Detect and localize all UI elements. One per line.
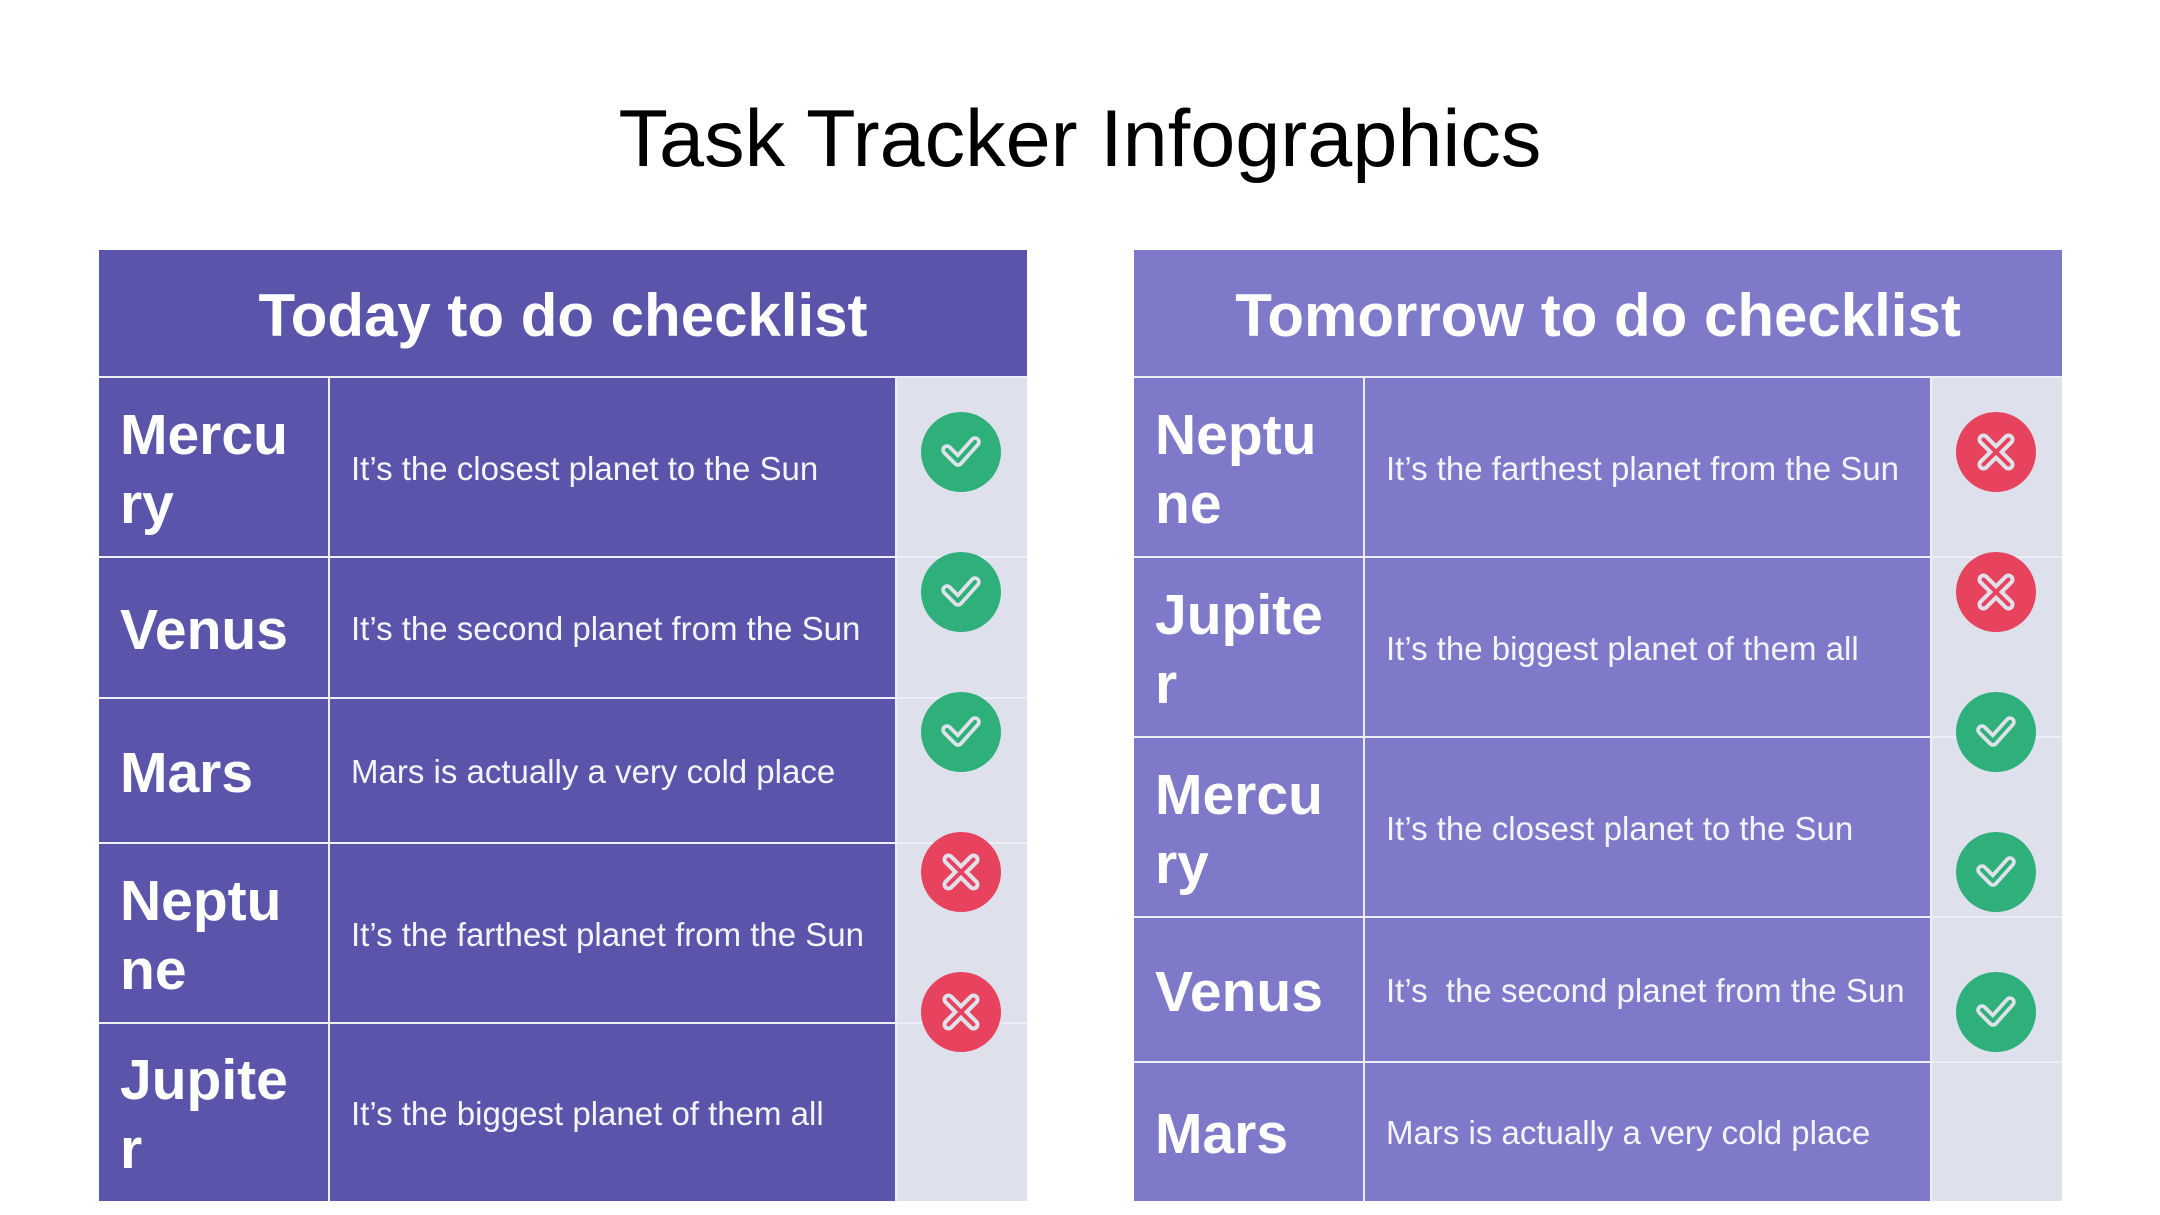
icon: check 1 [921, 412, 1001, 492]
icon: cross 2 [921, 972, 1001, 1052]
row name: Mercury: Mercu [1155, 762, 1323, 826]
row name: Jupiter: Jupite [120, 1048, 288, 1112]
icon: check 3 [1956, 972, 2036, 1052]
row name: Neptune [120, 868, 281, 1002]
status column [896, 377, 1027, 1201]
row name: Jupiter: r [1155, 652, 1177, 716]
row text: Mars: Mars is actually a very cold place [1386, 1114, 1870, 1151]
row text: Mercury: It’s the closest planet to the Sun [1386, 810, 1853, 846]
row name: Venus: Venus [120, 598, 288, 662]
row name: Venus: Venus [1155, 960, 1323, 1024]
row text: Jupiter: It’s the biggest planet of them all [351, 1094, 824, 1132]
row text: Neptune: It’s the farthest planet from the Sun [1386, 450, 1899, 486]
row name: Mercury: Mercu [120, 402, 288, 466]
row name: Mercury: ry [120, 472, 174, 536]
panel: tomorrow checklist [1134, 250, 2062, 1201]
row name: Neptune: Neptu [1155, 402, 1316, 466]
row name: Jupiter [1155, 582, 1323, 716]
row name: Neptune: Neptu [120, 868, 281, 932]
row name: Mercury [1155, 762, 1323, 896]
title: Task Tracker Infographics [619, 94, 1541, 184]
icon: check 3 [921, 692, 1001, 772]
row name: Jupiter [120, 1048, 288, 1180]
row name: Neptune [1155, 402, 1316, 536]
panel: today checklist [99, 250, 1027, 1201]
status column [1931, 377, 2062, 1201]
row name: Mercury: ry [1155, 832, 1209, 896]
icon: check 2 [921, 552, 1001, 632]
row name: Mars: Mars [1155, 1102, 1288, 1166]
row name: Jupiter: r [120, 1116, 142, 1180]
row name: Neptune: ne [1155, 472, 1222, 536]
row name: Mars: Mars [120, 740, 253, 804]
row text: Neptune: It’s the farthest planet from the Sun [351, 916, 864, 952]
icon: check 2 [1956, 832, 2036, 912]
heading: tomorrow: Tomorrow to do checklist [1235, 282, 1961, 349]
row text: Venus: It’s the second planet from the Sun [1386, 972, 1905, 1009]
icon: cross 1 [921, 832, 1001, 912]
icon: check 1 [1956, 692, 2036, 772]
row name: Jupiter: Jupite [1155, 582, 1323, 646]
row name: Neptune: ne [120, 938, 187, 1002]
icon: cross 2 [1956, 552, 2036, 632]
row text: Jupiter: It’s the biggest planet of them all [1386, 630, 1859, 666]
row text: Mercury: It’s the closest planet to the Sun [351, 450, 818, 486]
heading: today: Today to do checklist [258, 282, 868, 349]
icon: cross 1 [1956, 412, 2036, 492]
row name: Mercury [120, 402, 288, 536]
row text: Mars: Mars is actually a very cold place [351, 753, 835, 790]
row text: Venus: It’s the second planet from the Sun [351, 610, 860, 647]
